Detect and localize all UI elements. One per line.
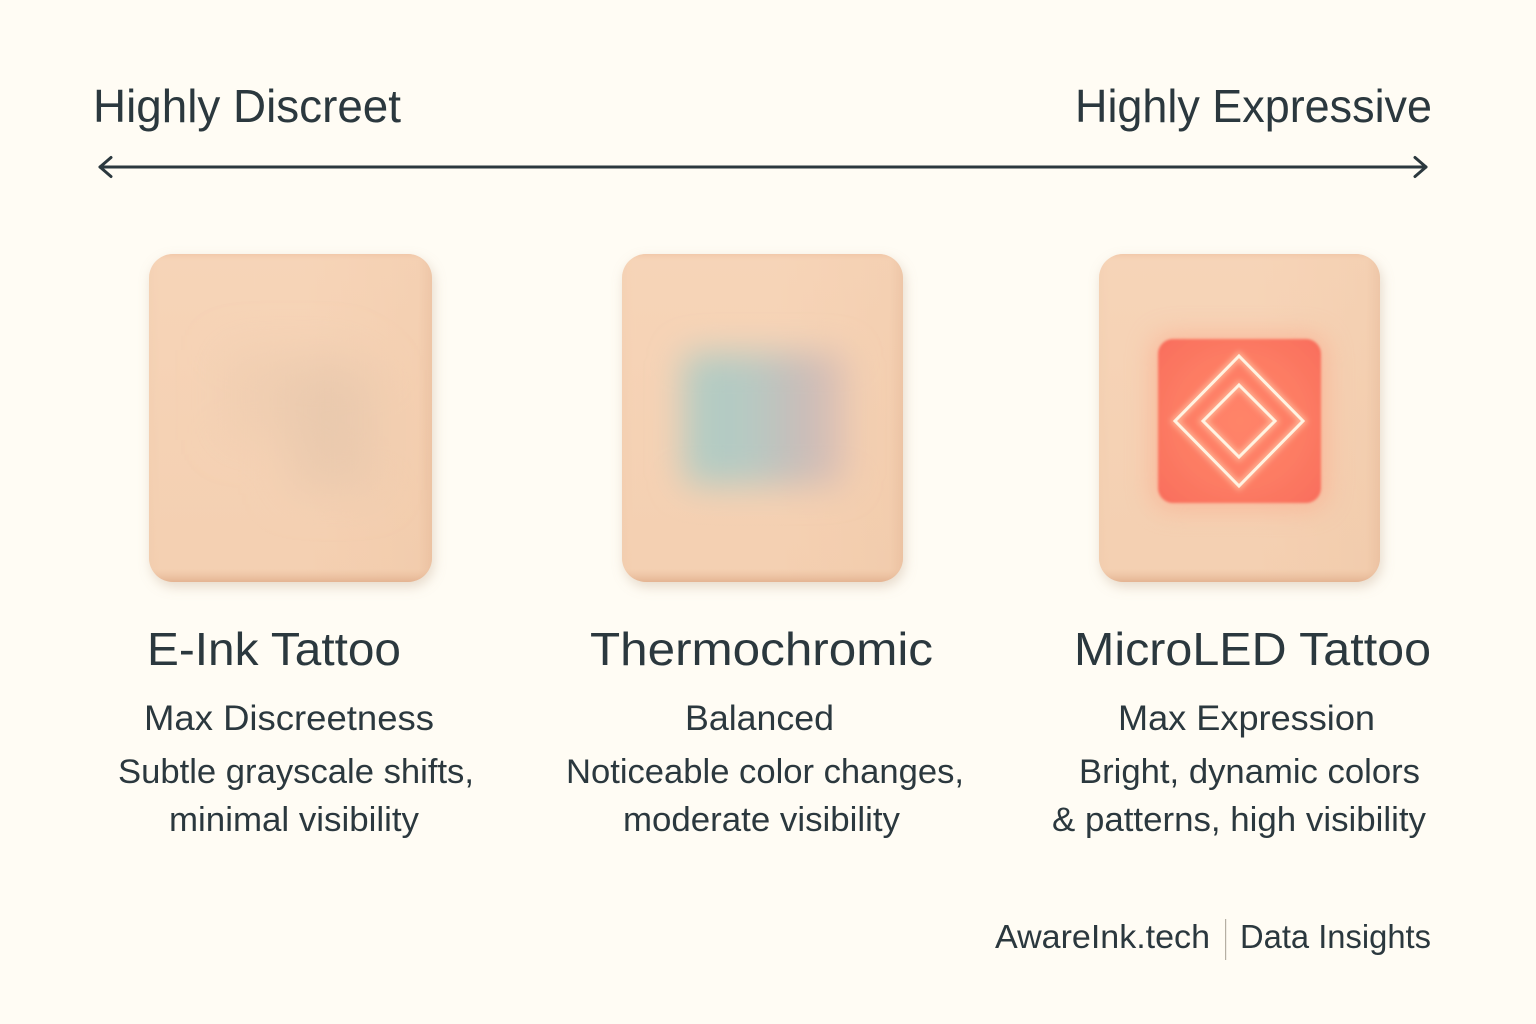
description: Thermochromic (566, 753, 964, 839)
description: E-Ink: minimal visibility (169, 801, 419, 839)
description: E-Ink (118, 753, 474, 839)
description: MicroLED: & patterns, high visibility (1052, 801, 1426, 839)
panel: MicroLED Tattoo (1052, 254, 1431, 839)
heading: MicroLED Tattoo: MicroLED Tattoo (1074, 623, 1431, 675)
heading: E-Ink Tattoo: E-Ink Tattoo (147, 623, 401, 675)
spectrum label: Highly Discreet: Highly Discreet (93, 80, 401, 132)
footer branding (995, 918, 1431, 960)
panel: E-Ink Tattoo (118, 254, 474, 839)
double-headed arrow (100, 158, 1426, 176)
LED square (1158, 339, 1321, 503)
blurred color-change patch (684, 353, 846, 485)
description: Thermochromic: Noticeable color changes, (566, 753, 964, 791)
spectrum label: Highly Expressive: Highly Expressive (1075, 80, 1432, 132)
description: E-Ink: Subtle grayscale shifts, (118, 753, 474, 791)
subheading: Max Expression: Max Expression (1118, 699, 1375, 738)
brand name: AwareInk.tech (995, 918, 1210, 955)
subheading: Max Discreetness: Max Discreetness (144, 699, 434, 738)
description: Thermochromic: moderate visibility (623, 801, 900, 839)
heading: Thermochromic: Thermochromic (590, 623, 933, 675)
icon: concentric diamonds (1175, 356, 1303, 486)
description: MicroLED (1052, 753, 1426, 839)
panel: Thermochromic (566, 254, 964, 839)
LED glow (1152, 334, 1327, 509)
skin patch: MicroLED (1099, 254, 1380, 582)
subheading: Balanced: Balanced (685, 699, 834, 738)
subtle grayscale patch (225, 350, 375, 490)
skin patch: E-Ink (149, 254, 432, 582)
brand tagline: Data Insights (1240, 918, 1431, 955)
description: MicroLED: Bright, dynamic colors (1079, 753, 1420, 791)
skin patch: Thermochromic (622, 254, 903, 582)
